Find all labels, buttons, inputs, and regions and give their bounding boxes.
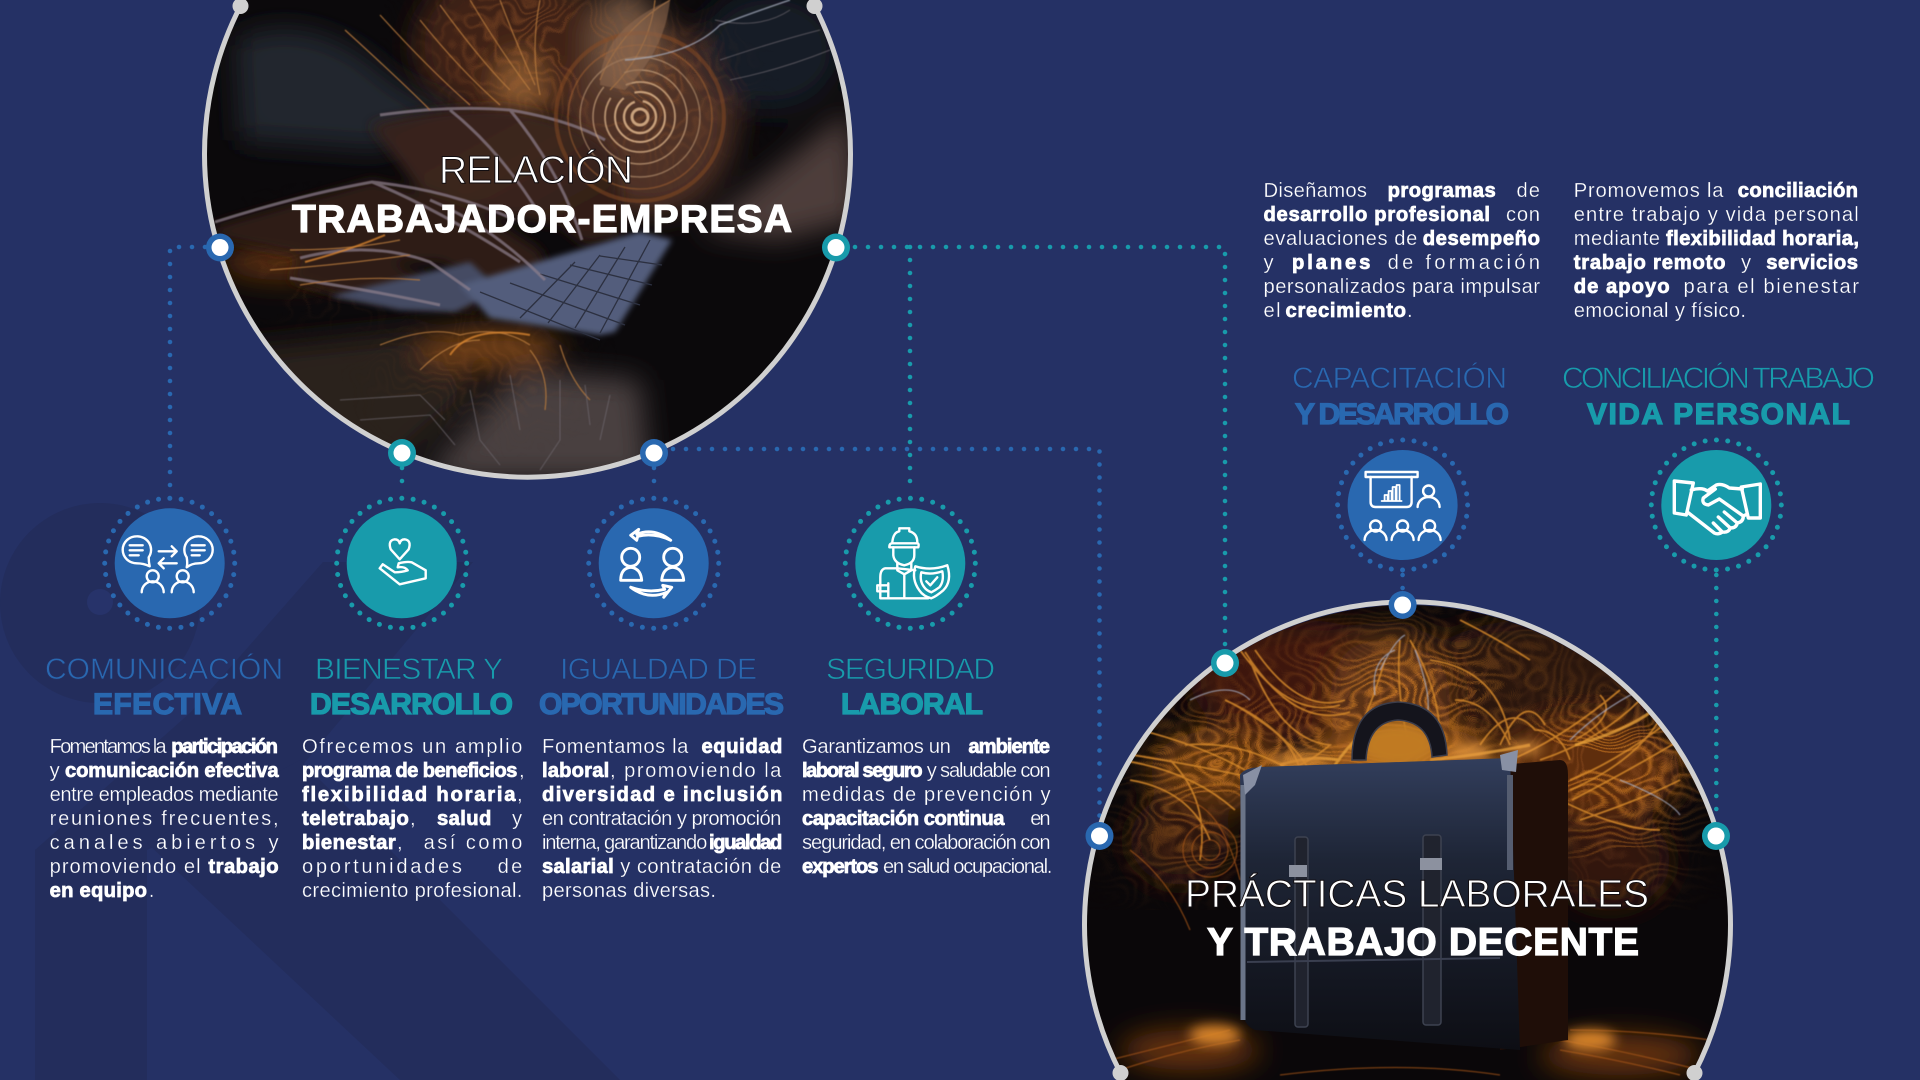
title: relación trabajador-empresa: TRABAJADOR-EMPRESA <box>292 198 792 241</box>
text: seguridad laboral: medidas de prevención y <box>802 784 1052 806</box>
text: conciliación trabajo vida personal: emocional y físico. <box>1574 300 1746 322</box>
watermark logo <box>0 503 620 1080</box>
node: bottom blue <box>640 439 668 467</box>
text: igualdad de oportunidades: salarial <box>542 856 614 878</box>
text: seguridad laboral: laboral seguro <box>802 760 923 782</box>
title: prácticas laborales: Y TRABAJO DECENTE <box>1207 921 1639 964</box>
text: igualdad de oportunidades: equidad <box>702 736 782 758</box>
text: comunicación efectiva: y <box>50 760 61 782</box>
text: capacitación y desarrollo <box>1264 180 1540 322</box>
heading: capacitación y desarrollo: Y DESARROLLO <box>1295 398 1509 431</box>
text: comunicación efectiva: . <box>149 880 154 902</box>
text: conciliación trabajo vida personal: flexibilidad horaria, <box>1666 228 1859 250</box>
text: conciliación trabajo vida personal: trabajo remoto <box>1574 252 1726 274</box>
heading: seguridad laboral: LABORAL <box>841 688 983 721</box>
heading: conciliación trabajo vida personal: CONCILIACIÓN TRABAJO <box>1562 362 1875 395</box>
text: bienestar y desarrollo: así como <box>424 832 522 854</box>
text: capacitación y desarrollo: y <box>1264 252 1274 274</box>
text: capacitación y desarrollo: desempeño <box>1423 228 1540 250</box>
text: bienestar y desarrollo: crecimiento profesional. <box>302 880 522 902</box>
text: capacitación y desarrollo: de formación <box>1388 252 1540 274</box>
photo: glowing briefcase <box>1070 590 1750 1080</box>
node: bottom circle teal upper <box>1211 649 1239 677</box>
text: capacitación y desarrollo: evaluaciones de <box>1264 228 1417 250</box>
title: prácticas laborales <box>1185 873 1649 964</box>
node: bottom teal <box>388 439 416 467</box>
text: capacitación y desarrollo: con <box>1506 204 1540 226</box>
outline end caps: bottom <box>1112 1065 1702 1080</box>
node: bottom circle top blue <box>1389 591 1417 619</box>
text: igualdad de oportunidades: en contratación y promoción <box>542 808 781 830</box>
heading: comunicación efectiva: COMUNICACIÓN <box>45 653 283 686</box>
heading: bienestar y desarrollo <box>310 653 513 721</box>
circle outline: bottom <box>1084 602 1730 1073</box>
heading: seguridad laboral: SEGURIDAD <box>826 653 995 686</box>
icon: seguridad laboral <box>845 498 975 628</box>
text: igualdad de oportunidades <box>542 736 782 902</box>
heading: conciliación trabajo vida personal: VIDA PERSONAL <box>1587 398 1850 431</box>
text: seguridad laboral: Garantizamos un <box>802 736 951 758</box>
text: igualdad de oportunidades: laboral <box>542 760 609 782</box>
text: igualdad de oportunidades: personas diversas. <box>542 880 716 902</box>
text: comunicación efectiva: promoviendo el <box>50 856 201 878</box>
text: conciliación trabajo vida personal: y <box>1741 252 1752 274</box>
text: comunicación efectiva: reuniones frecuentes, <box>50 808 279 830</box>
text: seguridad laboral: capacitación continua <box>802 808 1005 830</box>
text: comunicación efectiva: en equipo <box>50 880 147 902</box>
heading: igualdad de oportunidades <box>539 653 784 721</box>
text: conciliación trabajo vida personal: para el bienestar <box>1684 276 1859 298</box>
outline end caps: top <box>232 0 822 14</box>
text: bienestar y desarrollo: teletrabajo <box>302 808 409 830</box>
text: comunicación efectiva: trabajo <box>208 856 279 878</box>
text: capacitación y desarrollo: planes <box>1292 252 1370 274</box>
node: bottom circle right teal <box>1702 822 1730 850</box>
text: seguridad laboral: en <box>1030 808 1051 830</box>
text: capacitación y desarrollo: Diseñamos <box>1264 180 1367 202</box>
heading: igualdad de oportunidades: IGUALDAD DE <box>560 653 757 686</box>
text: bienestar y desarrollo: y <box>512 808 523 830</box>
text: conciliación trabajo vida personal <box>1574 180 1859 322</box>
text: comunicación efectiva <box>50 736 280 902</box>
node: bottom circle left blue <box>1086 822 1114 850</box>
photo: hands on laptop with circuits <box>190 0 870 490</box>
text: conciliación trabajo vida personal: mediante <box>1574 228 1660 250</box>
text: igualdad de oportunidades: , promoviendo la <box>610 760 782 782</box>
text: conciliación trabajo vida personal: entre trabajo y vida personal <box>1574 204 1859 226</box>
text: bienestar y desarrollo: de <box>498 856 522 878</box>
icon: conciliación trabajo vida personal <box>1651 440 1781 570</box>
text: conciliación trabajo vida personal: Promovemos la <box>1574 180 1724 202</box>
text: seguridad laboral: seguridad, en colaboración con <box>802 832 1051 854</box>
title: prácticas laborales: PRÁCTICAS LABORALES <box>1185 873 1649 916</box>
text: capacitación y desarrollo: el <box>1264 300 1281 322</box>
heading: igualdad de oportunidades: OPORTUNIDADES <box>539 688 784 721</box>
heading: capacitación y desarrollo: CAPACITACIÓN <box>1292 362 1507 395</box>
icon: capacitación y desarrollo <box>1338 440 1468 570</box>
node: right teal <box>822 234 850 262</box>
text: bienestar y desarrollo: , <box>519 760 525 782</box>
icon: igualdad de oportunidades <box>589 498 719 628</box>
node: left blue <box>206 234 234 262</box>
text: capacitación y desarrollo: desarrollo profesional <box>1264 204 1490 226</box>
title: relación trabajador-empresa <box>292 149 792 241</box>
text: capacitación y desarrollo: personalizados para impulsar <box>1264 276 1540 298</box>
connector lines <box>170 247 1716 822</box>
text: seguridad laboral: y saludable con <box>927 760 1051 782</box>
title: relación trabajador-empresa: RELACIÓN <box>439 149 633 192</box>
text: comunicación efectiva: entre empleados mediante <box>50 784 279 806</box>
text: capacitación y desarrollo: . <box>1407 300 1413 322</box>
text: capacitación y desarrollo: programas <box>1388 180 1496 202</box>
text: conciliación trabajo vida personal: de apoyo <box>1574 276 1670 298</box>
text: comunicación efectiva: comunicación efectiva <box>65 760 279 782</box>
heading: capacitación y desarrollo <box>1292 362 1509 431</box>
circle outline: top <box>204 6 850 477</box>
text: igualdad de oportunidades: diversidad e inclusión <box>542 784 782 806</box>
text: igualdad de oportunidades: Fomentamos la <box>542 736 689 758</box>
text: igualdad de oportunidades: igualdad <box>709 832 782 854</box>
text: bienestar y desarrollo: Ofrecemos un amplio <box>302 736 522 758</box>
text: bienestar y desarrollo: oportunidades <box>302 856 462 878</box>
heading: bienestar y desarrollo: BIENESTAR Y <box>315 653 503 686</box>
icon: bienestar y desarrollo <box>337 498 467 628</box>
heading: comunicación efectiva <box>45 653 283 721</box>
text: seguridad laboral: en salud ocupacional. <box>883 856 1052 878</box>
text: bienestar y desarrollo: bienestar <box>302 832 396 854</box>
text: capacitación y desarrollo: crecimiento <box>1286 300 1406 322</box>
icon: comunicación efectiva <box>105 498 235 628</box>
heading: bienestar y desarrollo: DESARROLLO <box>310 688 513 721</box>
text: comunicación efectiva: Fomentamos la <box>50 736 167 758</box>
text: seguridad laboral: expertos <box>802 856 878 878</box>
text: seguridad laboral <box>802 736 1052 878</box>
text: igualdad de oportunidades: y contratación de <box>620 856 781 878</box>
heading: seguridad laboral <box>826 653 995 721</box>
text: bienestar y desarrollo: salud <box>437 808 491 830</box>
text: conciliación trabajo vida personal: conciliación <box>1738 180 1858 202</box>
text: comunicación efectiva: canales abiertos y <box>50 832 280 854</box>
text: bienestar y desarrollo: programa de beneficios <box>302 760 517 782</box>
text: seguridad laboral: ambiente <box>968 736 1050 758</box>
text: bienestar y desarrollo: , <box>397 832 403 854</box>
text: bienestar y desarrollo: flexibilidad horaria <box>302 784 516 806</box>
text: capacitación y desarrollo: de <box>1516 180 1540 202</box>
text: igualdad de oportunidades: interna, garantizando <box>542 832 707 854</box>
text: conciliación trabajo vida personal: servicios <box>1766 252 1858 274</box>
text: bienestar y desarrollo: , <box>410 808 416 830</box>
text: bienestar y desarrollo: , <box>517 784 523 806</box>
heading: comunicación efectiva: EFECTIVA <box>93 688 242 721</box>
text: bienestar y desarrollo <box>302 736 525 902</box>
text: comunicación efectiva: participación <box>171 736 278 758</box>
heading: conciliación trabajo vida personal <box>1562 362 1875 431</box>
